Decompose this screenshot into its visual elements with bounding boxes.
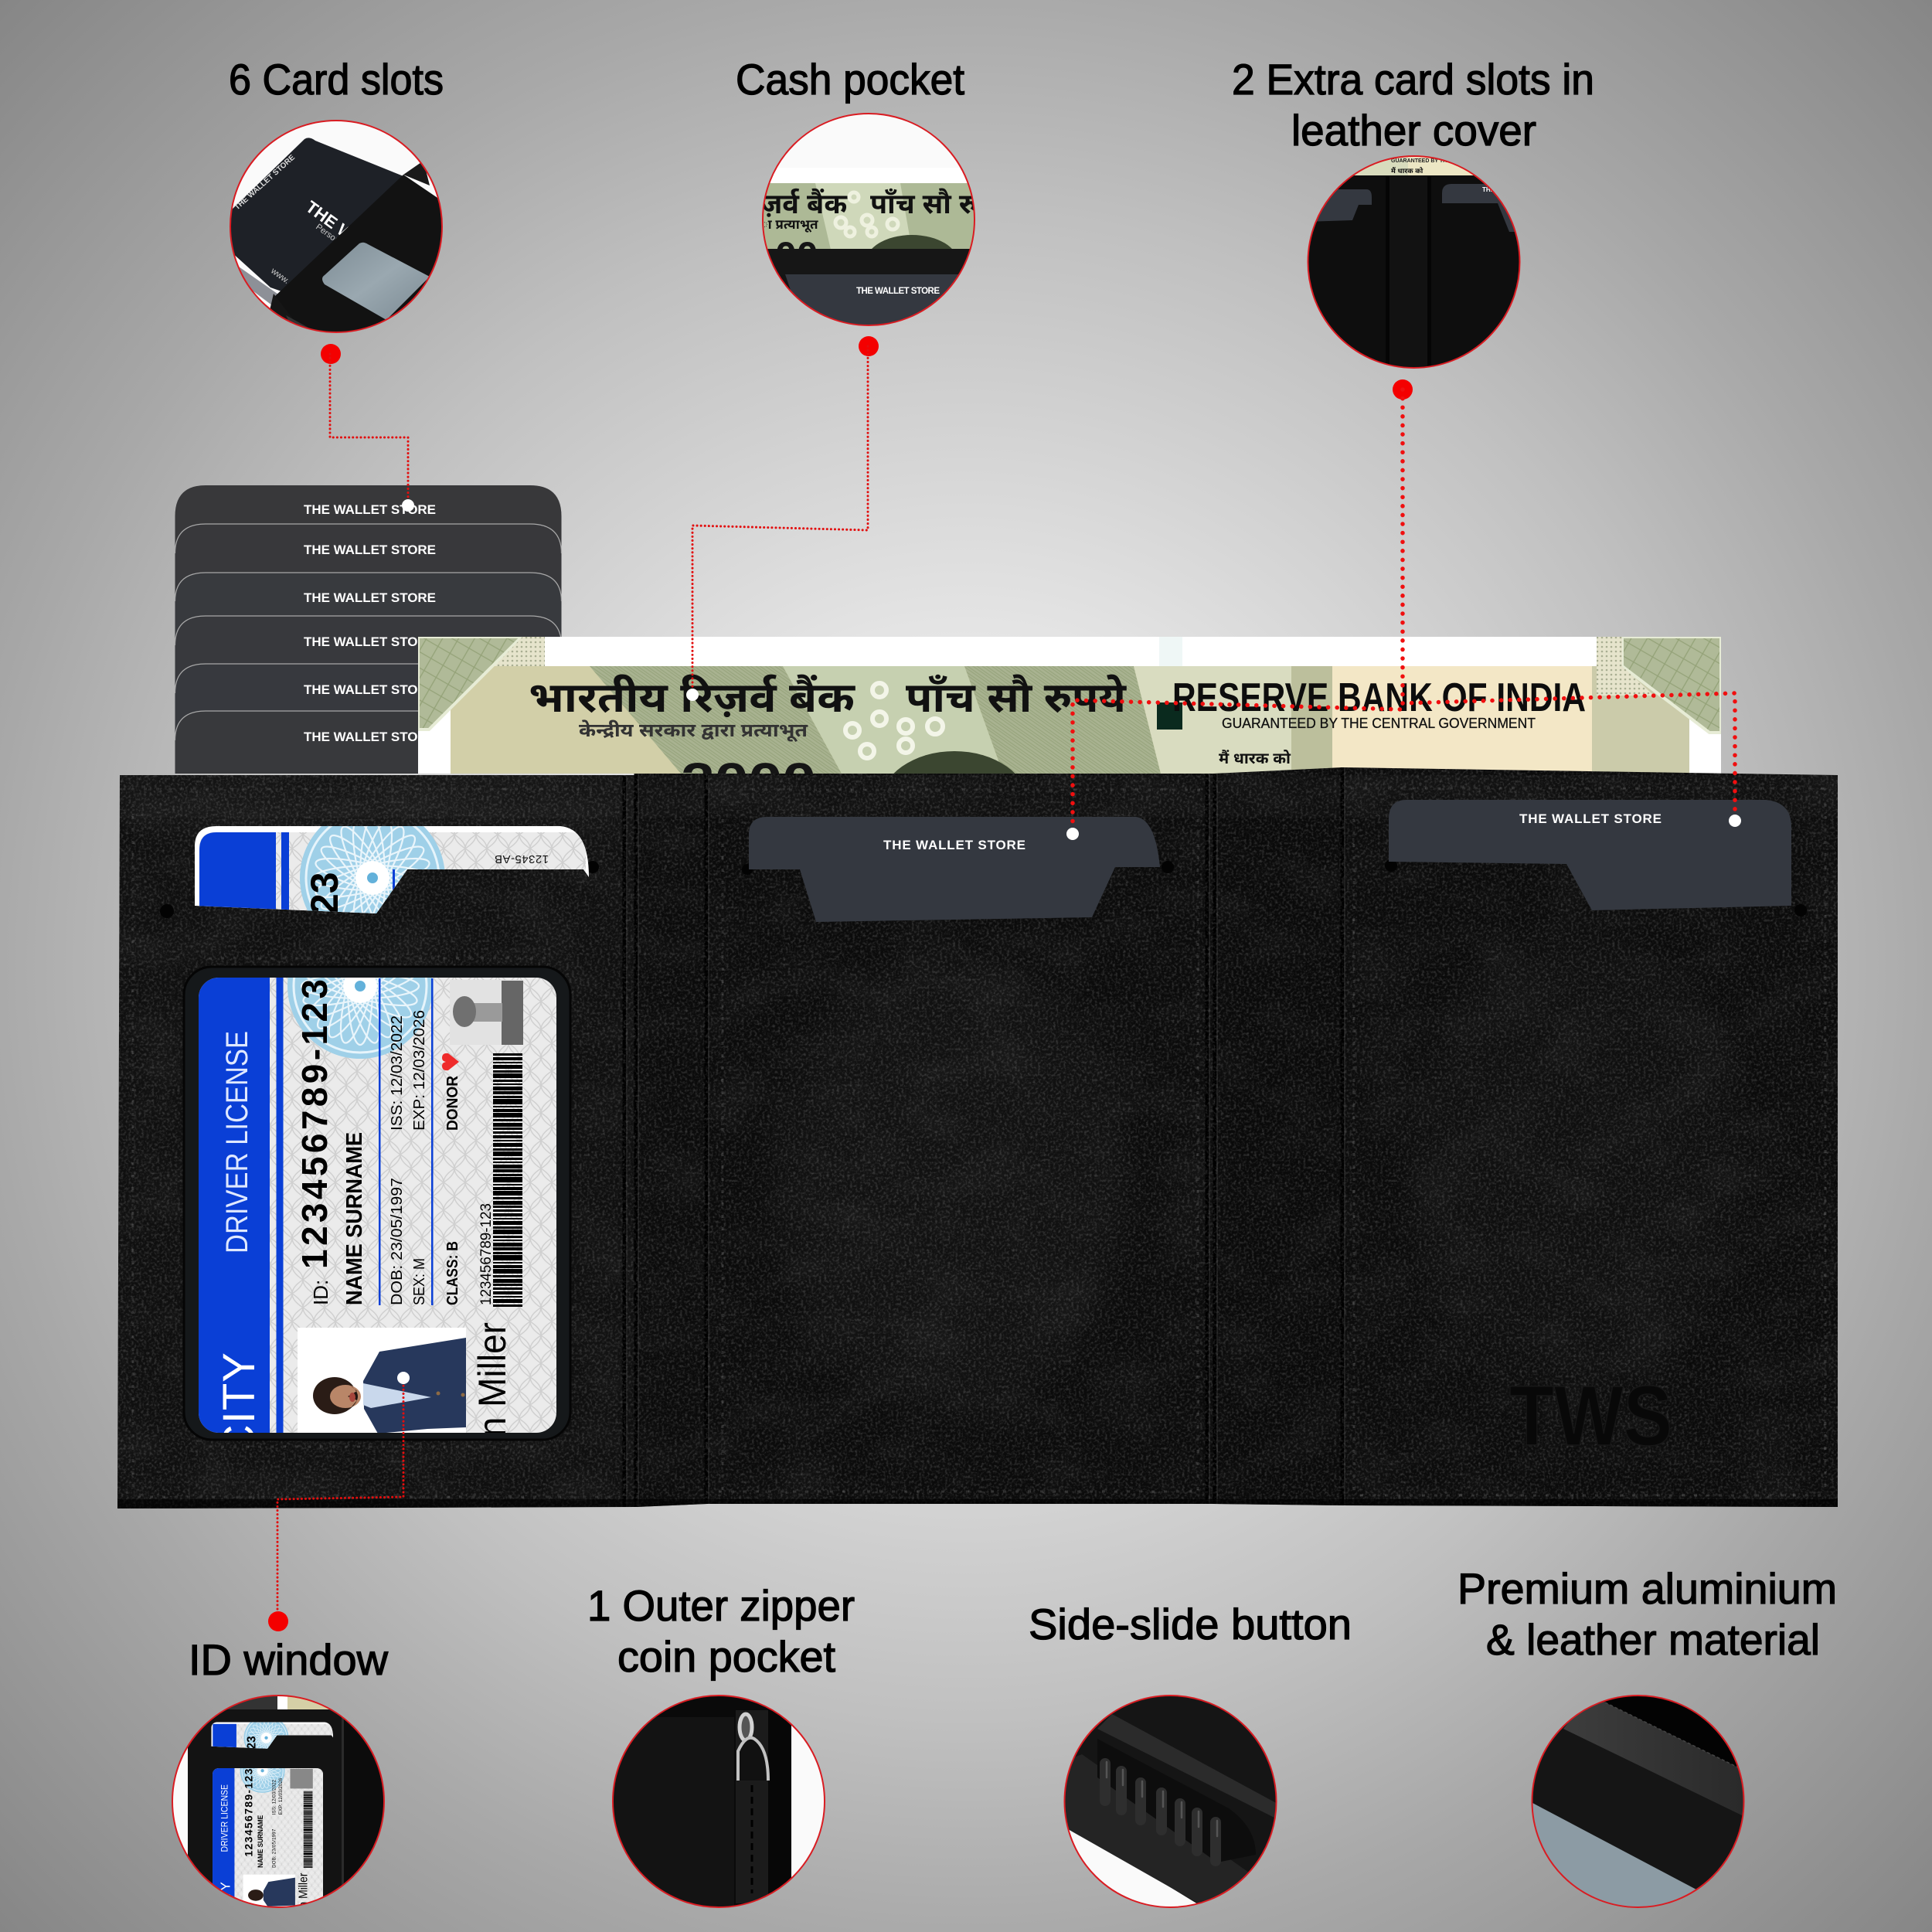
card 3 <box>175 573 561 774</box>
devanagari heading: भारतीय रिज़र्व बैंक <box>529 674 855 721</box>
heading: Side-slide button: Side-slide button <box>1029 1600 1352 1648</box>
license heading: DRIVER LICENSE <box>220 1031 254 1253</box>
blue rules <box>379 978 433 1305</box>
center panel <box>707 774 1213 1506</box>
mini license <box>211 1716 334 1913</box>
heart <box>442 1053 459 1070</box>
stack of 6 aluminium cards <box>175 485 561 774</box>
circle: zipper coin pocket close-up <box>611 1692 831 1913</box>
mini license: 123456789-123 <box>242 1768 254 1857</box>
blue header <box>199 978 270 1433</box>
white rosette marks <box>845 683 943 758</box>
portrait hair arc <box>893 751 1015 774</box>
connector: ID window <box>277 1378 403 1621</box>
details: DONOR <box>444 1075 461 1131</box>
mini license: ISS: 12/03/2022 <box>271 1779 277 1815</box>
mini license: 23 <box>246 1736 259 1749</box>
circle: cash pocket close-up: 00 <box>775 234 818 277</box>
holder name: n Miller <box>471 1322 514 1437</box>
circle: cash pocket close-up <box>760 112 978 328</box>
id number: 123456789-123 <box>294 979 335 1269</box>
heading: Premium aluminium & leather material: Premium aluminium <box>1458 1564 1837 1613</box>
mini license: DRIVER LICENSE <box>219 1784 230 1852</box>
card 4: THE WALLET STORE <box>304 634 436 649</box>
circle: extra slots in leather cover close-up: THE <box>1482 186 1495 193</box>
card 6: THE WALLET STORE <box>304 730 436 744</box>
heading: 1 Outer zipper coin pocket: 1 Outer zipper <box>587 1581 855 1630</box>
card 1: THE WALLET STORE <box>304 502 436 517</box>
top card in slot: 23 <box>303 872 346 915</box>
circle: cash pocket close-up: ज़र्व बैंक <box>760 188 848 219</box>
card 5 <box>175 664 561 774</box>
circle: extra slots in leather cover close-up <box>1306 155 1522 371</box>
stitching <box>131 788 1828 1497</box>
right panel <box>1342 767 1838 1507</box>
banknote <box>418 637 1721 774</box>
small ghost photo <box>450 980 523 1045</box>
card 6 <box>175 711 561 774</box>
leather creases <box>117 767 1839 1509</box>
main photo <box>298 1328 466 1434</box>
zipper pull <box>738 1714 768 1781</box>
card 2: THE WALLET STORE <box>304 543 436 557</box>
right gutter <box>1213 767 1342 1507</box>
heading: 2 Extra card slots in leather cover: 2 Extra card slots in <box>1232 55 1594 104</box>
crease tone <box>139 804 1747 1414</box>
details: 123456789-123 <box>478 1203 495 1305</box>
details: CLASS: B <box>444 1241 461 1305</box>
seam lines <box>624 767 1342 1507</box>
red connector dots above product <box>321 336 1413 400</box>
mini license: n Miller <box>298 1872 311 1908</box>
mini license: DOB: 23/05/1997 <box>271 1828 277 1868</box>
bottom edge shade <box>117 1499 1839 1509</box>
city label: CITY <box>214 1352 264 1457</box>
devanagari denomination: पाँच सौ रुपये <box>906 674 1128 721</box>
circle: ID window close-up <box>170 1692 390 1913</box>
top band tone <box>120 775 1837 818</box>
mini license: EXP: 12/03/2026 <box>278 1777 284 1815</box>
heading: Cash pocket: Cash pocket <box>736 55 964 104</box>
mini license: CITY <box>217 1882 233 1913</box>
card 2 <box>175 524 561 774</box>
circle: cash pocket close-up: THE WALLET STORE <box>856 287 940 296</box>
left gutter <box>637 774 707 1508</box>
details: DOB: 23/05/1997 <box>389 1178 406 1305</box>
heading: Premium aluminium & leather material <box>1458 1564 1837 1664</box>
connector: card slots <box>330 354 408 505</box>
red connector dot: ID window <box>268 1611 288 1631</box>
driver license card <box>199 913 556 1457</box>
circle: cash pocket close-up: पाँच सौ रु <box>870 187 978 219</box>
note body bands <box>451 637 1689 774</box>
circle: card slots close-up: www. <box>268 266 291 286</box>
slider fingers <box>1105 1764 1216 1861</box>
card 4 <box>175 616 561 774</box>
denomination figures: 2000 <box>681 753 816 808</box>
wallet open interior <box>117 767 1839 1509</box>
devanagari guarantee line: केन्द्रीय सरकार द्वारा प्रत्याभूत <box>579 719 808 742</box>
right aluminium card: THE WALLET STORE <box>1519 811 1662 826</box>
right aluminium card <box>1389 800 1791 910</box>
card 3: THE WALLET STORE <box>304 590 436 605</box>
mini license: NAME SURNAME <box>257 1815 264 1868</box>
circle: side-slide button close-up <box>1063 1692 1279 1913</box>
white anchor dots <box>397 499 1741 1384</box>
leather base and texture <box>117 767 1839 1509</box>
circle: card slots close-up <box>230 121 444 340</box>
connector: extra card slots <box>1073 389 1735 834</box>
circle: cash pocket close-up: ा प्रत्याभूत <box>761 217 818 233</box>
center aluminium card <box>749 817 1160 922</box>
circle: aluminium and leather close-up <box>1530 1692 1748 1917</box>
heading: ID window: ID window <box>189 1635 389 1684</box>
promise line: मैं धारक को <box>1219 749 1291 767</box>
heading: 1 Outer zipper coin pocket: coin pocket <box>617 1632 835 1681</box>
guarantee line: GUARANTEED BY THE CENTRAL GOVERNMENT <box>1222 716 1536 731</box>
card holes <box>160 859 1807 918</box>
details: SEX: M <box>411 1258 428 1305</box>
heading: Premium aluminium & leather material: & leather material <box>1486 1615 1820 1664</box>
top card in slot: 12345-AB <box>495 852 549 866</box>
leather grain <box>117 767 1839 1509</box>
right rosette corner <box>1597 637 1721 733</box>
center aluminium card: THE WALLET STORE <box>883 838 1026 852</box>
circle: card slots close-up: THE W <box>302 197 358 245</box>
top card in slot <box>193 805 591 951</box>
details: ISS: 12/03/2022 <box>389 1015 406 1131</box>
left panel <box>117 775 637 1509</box>
connector: cash pocket <box>692 346 868 695</box>
circle: card slots close-up: Person <box>314 223 341 246</box>
english bank title: RESERVE BANK OF INDIA <box>1172 675 1586 720</box>
barcode <box>493 1053 522 1307</box>
card 1 <box>175 485 561 774</box>
name: NAME SURNAME <box>342 1132 367 1305</box>
heading: 6 Card slots: 6 Card slots <box>229 55 444 104</box>
circle: extra slots in leather cover close-up: GUARANTEED BY THE CENTRAL <box>1391 158 1478 164</box>
embossed logo: TWS <box>1509 1369 1672 1464</box>
circle: extra slots in leather cover close-up: मैं धारक को <box>1391 166 1423 175</box>
details: EXP: 12/03/2026 <box>411 1010 428 1131</box>
seal <box>287 913 433 1059</box>
id number: ID: <box>309 1280 332 1305</box>
left rosette corner <box>418 637 545 731</box>
ID window frame <box>184 967 570 1440</box>
card 5: THE WALLET STORE <box>304 682 436 697</box>
heading: 2 Extra card slots in leather cover: leather cover <box>1291 106 1536 155</box>
security thread mark <box>1157 702 1182 730</box>
details <box>389 1010 495 1305</box>
circle: card slots close-up: THE WALLET STORE <box>233 153 297 212</box>
heading: 2 Extra card slots in leather cover <box>1232 55 1594 155</box>
heading: 1 Outer zipper coin pocket <box>587 1581 855 1681</box>
